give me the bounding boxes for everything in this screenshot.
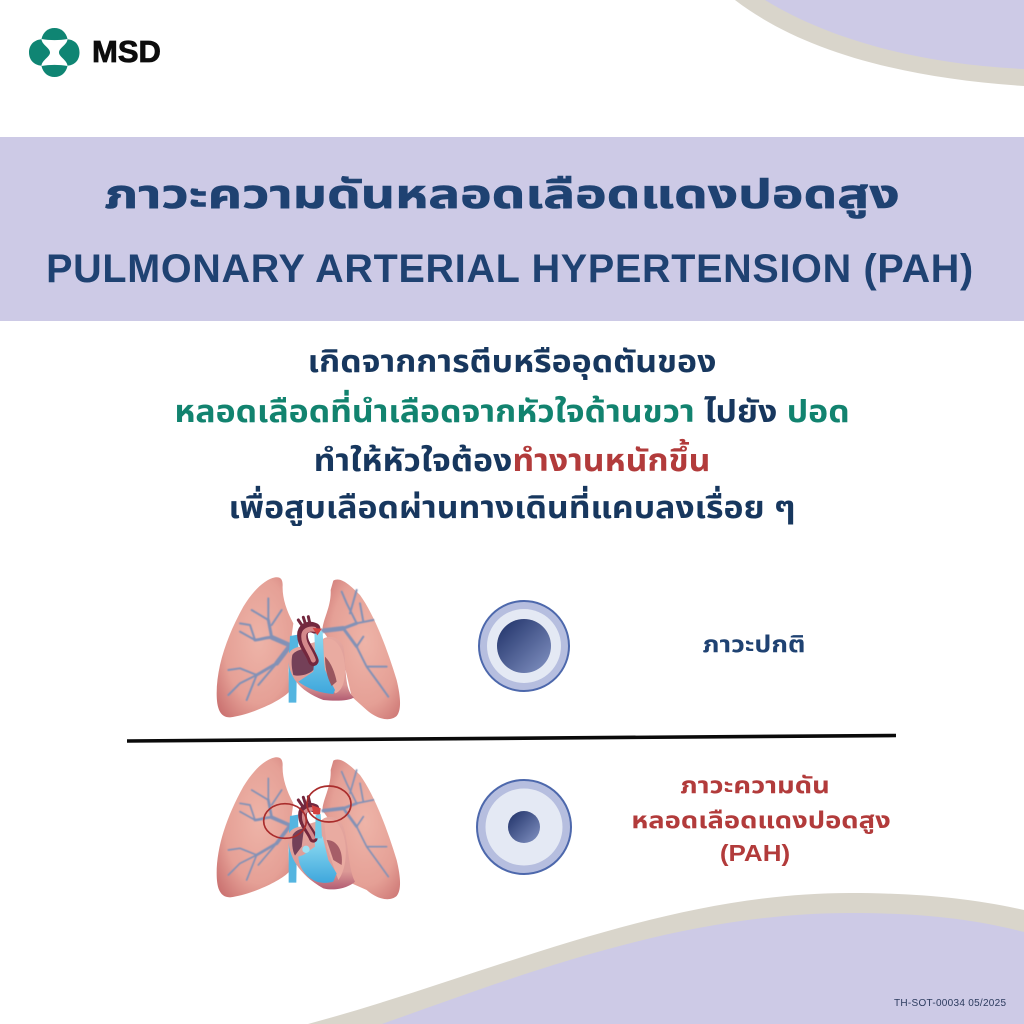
dark chamber [292,828,304,856]
logo wordmark: MSD [92,34,161,69]
heading: Thai title: ภาวะความดันหลอดเลือดแดงปอดสูง [104,173,900,217]
dark chamber [292,648,315,676]
lungs: normal [217,577,400,719]
vessels right [323,590,388,697]
vena cava [289,815,299,883]
right lung [323,759,400,899]
vessels right [323,770,388,877]
shaded chamber [327,840,342,865]
blue upper column [315,814,322,838]
aorta [298,797,315,838]
red circles: narrowed vessels [264,786,351,838]
text block: description: หลอดเลือดที่นำเลือดจากหัวใจด้านขวา ไปยัง ปอด [174,394,850,429]
text block: description: เกิดจากการตีบหรืออุดตันของ [308,344,716,379]
aorta [298,617,315,661]
label: PAH condition: (PAH) [720,840,790,866]
heart body [288,817,355,889]
left lung [217,577,293,717]
red artery [312,805,321,815]
right lung [323,579,400,719]
logo: MSD [29,28,161,77]
right chamber [325,657,337,686]
lungs: PAH [217,757,400,899]
heart body [288,637,354,701]
text block: description: ทำให้หัวใจต้องทำงานหนักขึ้น [314,443,710,478]
divider line [127,736,896,741]
label: normal condition: ภาวะปกติ [703,631,805,657]
text block: description [174,344,850,526]
footer code: TH-SOT-00034 05/2025 [894,998,1006,1009]
icon: MSD emblem [29,28,80,77]
enlarged heart [264,786,355,889]
text block: description: เพื่อสูบเลือดผ่านทางเดินที่แคบลงเรื่อย ๆ [228,490,796,525]
vessel cross-section: PAH [477,780,571,874]
vessel cross-section: normal [479,601,569,691]
heart [288,617,354,703]
blue chamber [298,837,337,883]
left lung [217,757,293,897]
panel: title band [0,137,1024,321]
pale right bulge [324,819,346,880]
label: PAH condition: ภาวะความดัน [680,772,830,798]
vessels left [228,778,289,880]
small blue valve [302,846,310,853]
blue chamber [298,630,335,694]
red artery [313,628,322,635]
label: PAH condition: หลอดเลือดแดงปอดสูง [631,807,891,833]
vessels left [228,598,289,700]
pale right bulge [324,639,345,693]
label: PAH condition [631,772,891,866]
heading: English title: PULMONARY ARTERIAL HYPERTENSION (PAH) [46,247,974,291]
vena cava [289,635,299,703]
